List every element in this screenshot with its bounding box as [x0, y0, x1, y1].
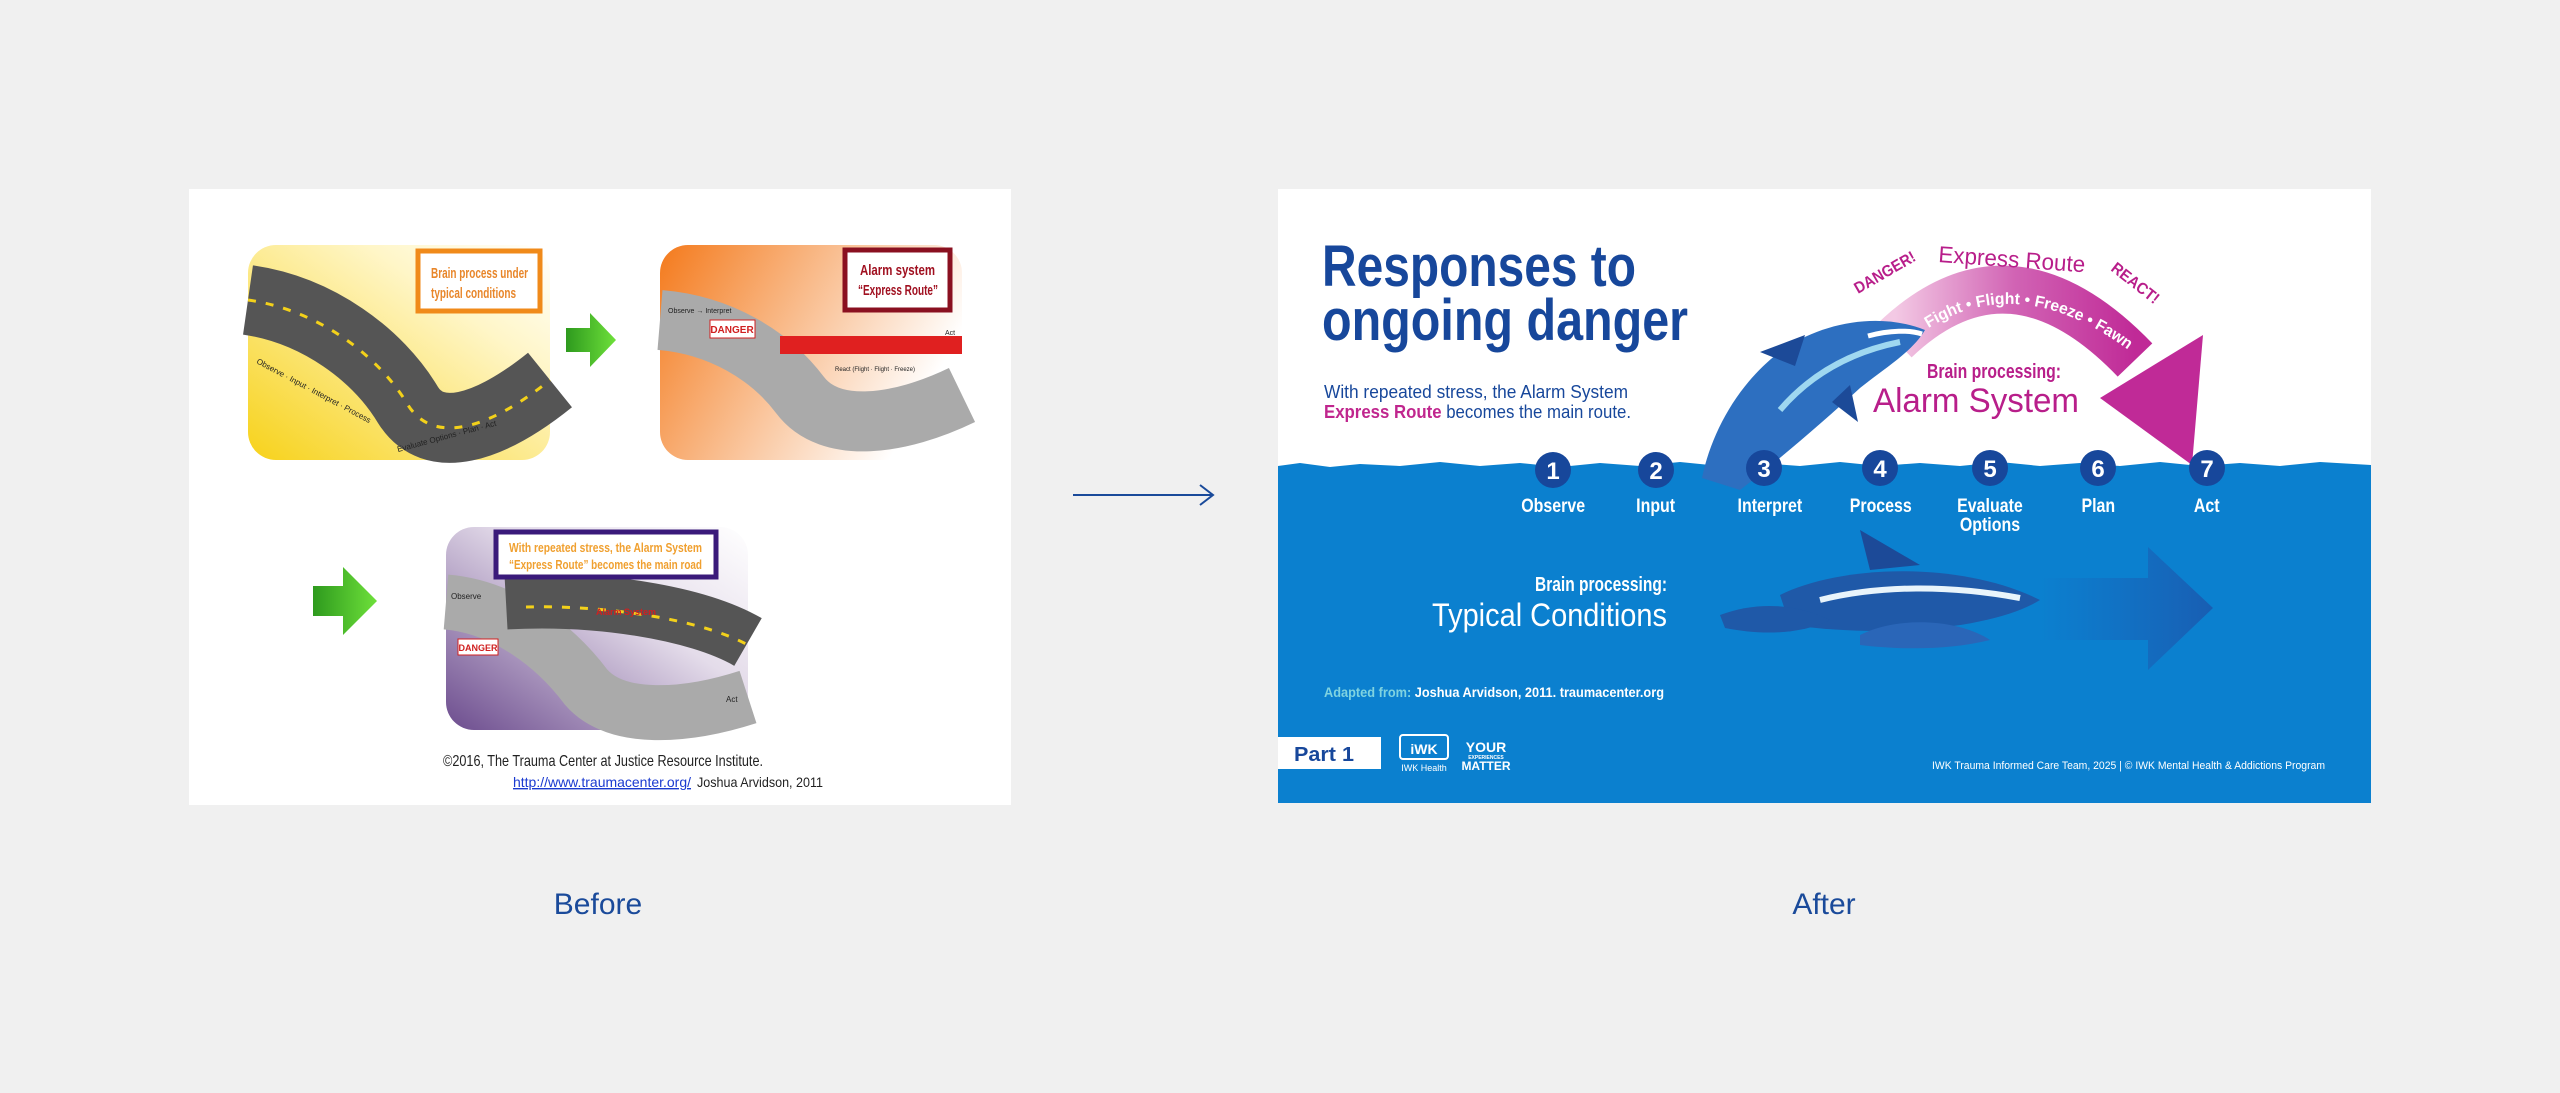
credit text: ©2016, The Trauma Center at Justice Resource Institute. — [443, 753, 763, 770]
alarm system label — [1873, 361, 2079, 420]
card: alarm express route: Observe → Interpret — [668, 308, 731, 315]
step labels: Act — [2194, 495, 2220, 516]
card: repeated stress: “Express Route” becomes the main road — [509, 557, 702, 572]
arrow: green 1 — [566, 313, 616, 367]
step labels: Input — [1636, 495, 1675, 516]
card: typical conditions: Brain process under — [431, 265, 528, 282]
footer credit: IWK Trauma Informed Care Team, 2025 | © IWK Mental Health & Addictions Program — [1932, 760, 2325, 772]
express route arc arrow: DANGER! — [1852, 249, 1919, 297]
typical conditions label: Brain processing: — [1535, 574, 1667, 596]
logo: IWK Health: iWK — [1410, 741, 1438, 757]
step labels: Observe — [1521, 495, 1585, 516]
arrow: before to after — [1073, 485, 1213, 505]
credit text: http://www.traumacenter.org/ — [513, 774, 691, 790]
step labels: Options — [1960, 514, 2020, 535]
card: alarm express route: DANGER — [710, 325, 754, 336]
step numbers: 1 — [1546, 458, 1560, 485]
part 1 tab: Part 1 — [1294, 744, 1354, 766]
card: alarm express route — [660, 245, 962, 460]
step numbers: 2 — [1649, 458, 1663, 485]
typical conditions label — [1432, 574, 1667, 633]
label: after: After — [1792, 888, 1856, 921]
title — [1322, 234, 1688, 353]
alarm system label: Alarm System — [1873, 382, 2079, 420]
jumping dolphin — [1702, 321, 1925, 490]
express route arc arrow: REACT! — [2108, 260, 2162, 308]
express route arc arrow: Fight • Flight • Freeze • Fawn — [1924, 292, 2132, 349]
express route arc arrow: Express Route — [1938, 241, 2086, 277]
step numbers: 4 — [1873, 456, 1887, 483]
step labels: Process — [1850, 495, 1912, 516]
card: repeated stress — [446, 527, 748, 730]
source: Adapted from: Joshua Arvidson, 2011. traumacenter.org — [1324, 684, 1664, 700]
subtitle: With repeated stress, the Alarm System — [1324, 382, 1628, 402]
logo: your experiences matter: MATTER — [1461, 759, 1511, 773]
step labels: Evaluate — [1957, 495, 2023, 516]
arrow: green 2 — [313, 567, 377, 635]
card: repeated stress: Act — [726, 695, 738, 704]
logo: IWK Health: IWK Health — [1401, 763, 1447, 773]
card: typical conditions: typical conditions — [431, 285, 516, 302]
step numbers: 7 — [2200, 456, 2214, 483]
card: alarm express route: Act — [945, 330, 955, 337]
panel: before — [189, 189, 1011, 805]
step numbers: 3 — [1757, 456, 1771, 483]
card: alarm express route: React (Flight · Flight · Freeze) — [835, 367, 915, 373]
title: Responses to — [1322, 234, 1636, 299]
step labels — [1521, 495, 2220, 535]
part 1 tab — [1278, 737, 1381, 769]
logo: your experiences matter — [1461, 739, 1511, 773]
blue arrow — [2040, 547, 2213, 670]
card: typical conditions: Observe · Input · Interpret · Process — [255, 357, 372, 425]
step numbers — [1535, 450, 2225, 488]
credit text — [443, 753, 823, 790]
card: typical conditions: Evaluate Options · Plan · Act — [396, 419, 498, 454]
express route arc arrow — [1852, 241, 2203, 464]
step numbers: 6 — [2091, 456, 2105, 483]
step numbers: 5 — [1983, 456, 1997, 483]
subtitle: Express Route becomes the main route. — [1324, 402, 1631, 422]
card: repeated stress: Observe — [451, 592, 482, 601]
title: ongoing danger — [1322, 288, 1688, 353]
card: alarm express route: Alarm system — [860, 262, 935, 279]
swimming dolphins — [1720, 530, 2040, 648]
panel: after — [1278, 189, 2371, 803]
logo: your experiences matter: EXPERIENCES — [1468, 755, 1504, 761]
logo: your experiences matter: YOUR — [1466, 739, 1506, 755]
subtitle — [1324, 382, 1631, 422]
alarm system label: Brain processing: — [1927, 361, 2061, 383]
card: repeated stress: DANGER — [458, 643, 498, 653]
water — [1278, 462, 2371, 803]
logo: IWK Health — [1400, 735, 1448, 773]
typical conditions label: Typical Conditions — [1432, 597, 1667, 633]
card: typical conditions — [248, 245, 550, 460]
label: before: Before — [554, 888, 642, 921]
step labels: Interpret — [1738, 495, 1802, 516]
step labels: Plan — [2081, 495, 2115, 516]
card: repeated stress: With repeated stress, the Alarm System — [509, 540, 702, 555]
credit text: Joshua Arvidson, 2011 — [697, 774, 823, 790]
card: repeated stress: Alarm System — [596, 607, 656, 617]
card: alarm express route: “Express Route” — [858, 282, 938, 299]
